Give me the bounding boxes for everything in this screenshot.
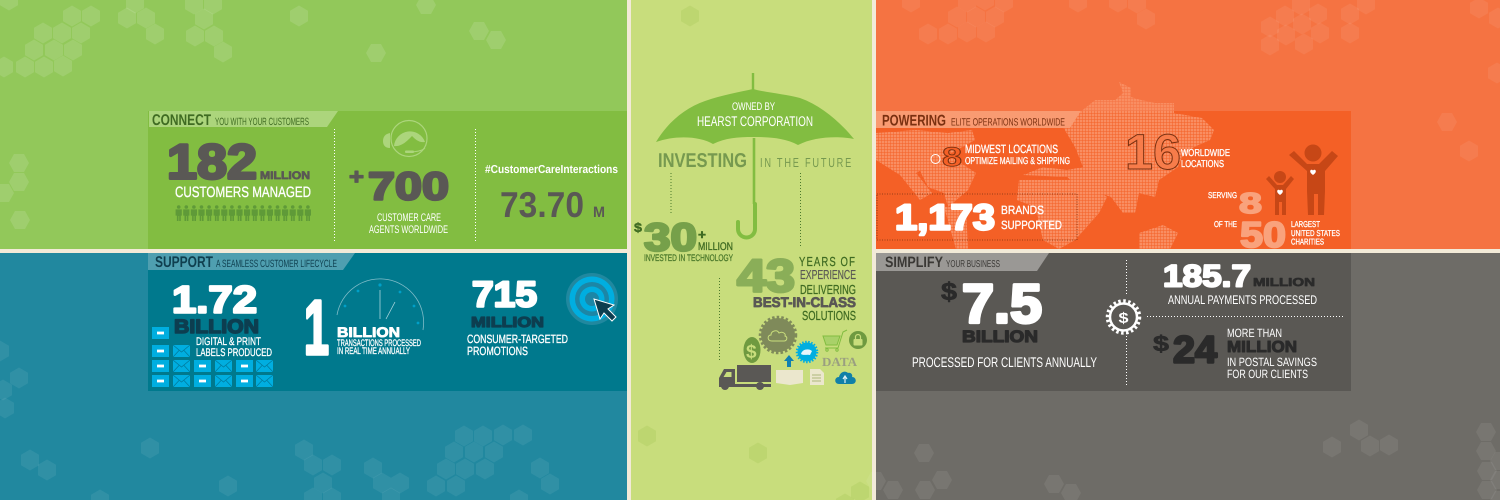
- stat: 16 worldwide locations: [1125, 124, 1230, 180]
- panel: connect stats: [148, 111, 627, 249]
- umbrella label: HEARST CORPORATION: [697, 113, 813, 129]
- stat: serving 8 of the 50 charities: 50: [1240, 214, 1286, 255]
- heading: investing in the future: INVESTING: [658, 150, 747, 172]
- tab: support heading: [148, 253, 355, 271]
- icon: headset agent: [383, 120, 427, 156]
- stat: 1.72 billion labels: DIGITAL & PRINT: [196, 336, 261, 348]
- icon: lock: [849, 331, 867, 349]
- icon: data label: DATA: [822, 355, 857, 369]
- tab: powering heading: ELITE OPERATIONS WORLDWIDE: [951, 116, 1065, 128]
- icon: row of people: [176, 205, 311, 221]
- stat: 24 million postal savings: IN POSTAL SAVINGS: [1227, 355, 1317, 369]
- stat: 715 million promotions: MILLION: [471, 315, 544, 331]
- world map: [876, 82, 1214, 249]
- stat: 185.7 million payments: ANNUAL PAYMENTS PROCESSED: [1168, 293, 1317, 307]
- stat: 24 million postal savings: 24: [1173, 330, 1217, 372]
- stat: 1 billion transactions: 1: [304, 285, 329, 371]
- stat: 30 million technology: +: [698, 227, 706, 242]
- stat: 30 million technology: INVESTED IN TECHNOLOGY: [644, 253, 733, 264]
- stat: 1,173 brands supported: BRANDS: [1001, 203, 1044, 217]
- icon: umbrella: [656, 73, 854, 238]
- icon: upload cloud: [835, 372, 856, 384]
- stat: 700 agents: +: [349, 164, 364, 189]
- panel: powering stats: [876, 82, 1351, 255]
- stat: 1.72 billion labels: [172, 280, 272, 359]
- tab: powering heading: [876, 111, 1081, 130]
- stat: 1 billion transactions: IN REAL TIME ANNUALLY: [337, 346, 410, 357]
- stat: serving 8 of the 50 charities: 8: [1239, 188, 1262, 220]
- stat: 1,173 brands supported: 1,173: [895, 196, 995, 238]
- stat: 24 million postal savings: MORE THAN: [1227, 326, 1282, 340]
- heading: investing in the future: [658, 150, 853, 172]
- stat: 182 million customers: [167, 136, 311, 201]
- stat: 30 million technology: $: [634, 220, 643, 235]
- icon: clock gauge: [337, 279, 424, 330]
- stat: 16 worldwide locations: 16: [1125, 124, 1181, 180]
- icon: dollar gear: [1108, 301, 1140, 333]
- stat: 185.7 million payments: MILLION: [1253, 277, 1315, 289]
- icon: dollar stack: [744, 337, 760, 363]
- stat: 43 years of experience: YEARS OF: [799, 254, 856, 269]
- umbrella label: OWNED BY: [732, 101, 775, 113]
- stat: 715 million promotions: [467, 274, 568, 358]
- stat: serving 8 of the 50 charities: OF THE: [1214, 219, 1237, 229]
- panel: support stats: [148, 253, 627, 391]
- stat: 7.5 billion processed: PROCESSED FOR CLIENTS ANNUALLY: [912, 354, 1097, 370]
- umbrella label: [697, 101, 813, 129]
- tab: simplify heading: YOUR BUSINESS: [946, 259, 1000, 270]
- icon: upload arrow: [784, 355, 794, 367]
- icon: document: [810, 369, 824, 385]
- tab: simplify heading: SIMPLIFY: [885, 254, 943, 271]
- stat: customer care interactions: #CustomerCareInteractions: [485, 164, 618, 176]
- panel: simplify stats: [876, 253, 1351, 391]
- stat: 182 million customers: MILLION: [260, 170, 310, 182]
- stat: 16 worldwide locations: WORLDWIDE: [1181, 148, 1230, 159]
- icon: blue gear: [797, 342, 817, 362]
- stat: 185.7 million payments: [1163, 258, 1317, 307]
- stat: 1.72 billion labels: BILLION: [174, 316, 259, 338]
- tab: support heading: A SEAMLESS CUSTOMER LIFECYCLE: [216, 258, 337, 270]
- panel: simplify background: [866, 253, 1500, 500]
- stat: 43 years of experience: 43: [737, 250, 795, 302]
- stat: 1.72 billion labels: 1.72: [172, 280, 257, 322]
- stat: 715 million promotions: CONSUMER-TARGETED: [467, 332, 568, 346]
- stat: serving 8 of the 50 charities: [1208, 188, 1340, 255]
- stat: 1,173 brands supported: SUPPORTED: [1001, 218, 1062, 232]
- stat: 7.5 billion processed: [912, 272, 1097, 370]
- stat: 8 midwest locations: OPTIMIZE MAILING & SHIPPING: [965, 156, 1070, 167]
- tab: simplify heading: [876, 253, 1049, 271]
- stat: 24 million postal savings: $: [1153, 331, 1169, 356]
- icon: target with cursor: [566, 273, 618, 325]
- icon: adult and child figures: [1266, 144, 1338, 215]
- stat: 24 million postal savings: MILLION: [1227, 339, 1297, 356]
- stat: 1 billion transactions: BILLION: [337, 324, 400, 340]
- stat: customer care interactions: 73.70: [500, 184, 584, 225]
- stat: 182 million customers: 182: [167, 136, 257, 190]
- icon: dollar stack: $: [746, 342, 757, 363]
- stat: 43 years of experience: BEST-IN-CLASS: [753, 294, 856, 310]
- icon: cloud gear: [760, 318, 796, 352]
- tab: connect heading: YOU WITH YOUR CUSTOMERS: [215, 116, 309, 128]
- stat: 700 agents: 700: [368, 166, 449, 208]
- tab: connect heading: CONNECT: [152, 112, 211, 129]
- stat: 24 million postal savings: FOR OUR CLIENTS: [1227, 367, 1308, 381]
- icon: box: [776, 370, 803, 385]
- stat: 185.7 million payments: 185.7: [1163, 258, 1251, 294]
- stat: 182 million customers: CUSTOMERS MANAGED: [175, 184, 311, 201]
- stat: 700 agents: AGENTS WORLDWIDE: [369, 224, 448, 236]
- panel: connect background: [0, 0, 627, 249]
- stat: customer care interactions: M: [593, 204, 605, 221]
- icon: dollar gear: $: [1118, 310, 1129, 327]
- stat: 700 agents: [349, 164, 449, 236]
- panel: investing background: [631, 0, 872, 500]
- stat: serving 8 of the 50 charities: SERVING: [1208, 190, 1237, 200]
- stat: serving 8 of the 50 charities: CHARITIES: [1291, 236, 1324, 246]
- stat: 8 midwest locations: MIDWEST LOCATIONS: [965, 142, 1058, 156]
- stat: 7.5 billion processed: BILLION: [962, 328, 1038, 346]
- icon: shopping cart: [823, 330, 847, 351]
- stat: customer care interactions: [485, 164, 618, 225]
- stat: 30 million technology: MILLION: [698, 241, 733, 253]
- stat: 1 billion transactions: TRANSACTIONS PROCESSED: [337, 338, 421, 349]
- stat: 715 million promotions: 715: [472, 274, 537, 314]
- icon: truck: [719, 365, 771, 390]
- tab: connect heading: [149, 111, 338, 129]
- stat: 715 million promotions: PROMOTIONS: [467, 344, 528, 358]
- stat: 7.5 billion processed: 7.5: [962, 272, 1042, 334]
- icon: envelopes and labels grid: [152, 327, 273, 387]
- stat: 24 million postal savings: [1153, 326, 1317, 381]
- stat: 43 years of experience: DELIVERING: [800, 282, 856, 297]
- stat: 43 years of experience: [737, 250, 856, 323]
- stat: 1.72 billion labels: LABELS PRODUCED: [196, 347, 272, 359]
- stat: 30 million technology: [634, 216, 733, 264]
- stat: 16 worldwide locations: LOCATIONS: [1181, 159, 1224, 170]
- stat: 43 years of experience: EXPERIENCE: [800, 267, 856, 282]
- panel: support background: [0, 253, 627, 500]
- stat: serving 8 of the 50 charities: LARGEST: [1291, 219, 1320, 229]
- stat: 43 years of experience: SOLUTIONS: [802, 308, 856, 323]
- stat: 700 agents: CUSTOMER CARE: [377, 212, 441, 224]
- stat: 8 midwest locations: 8: [942, 142, 962, 172]
- heading: investing in the future: IN THE FUTURE: [760, 155, 853, 170]
- stat: 30 million technology: 30: [644, 216, 697, 260]
- stat: serving 8 of the 50 charities: UNITED STATES: [1291, 228, 1340, 238]
- stat: 1 billion transactions: [304, 285, 421, 371]
- icons: technology cluster: [719, 318, 867, 390]
- stat: 7.5 billion processed: $: [941, 278, 957, 306]
- stat: 1,173 brands supported: [877, 194, 1077, 240]
- tab: support heading: SUPPORT: [155, 254, 213, 271]
- stat: 8 midwest locations: [931, 142, 1070, 172]
- panel: powering background: [876, 0, 1500, 249]
- tab: powering heading: POWERING: [882, 112, 946, 130]
